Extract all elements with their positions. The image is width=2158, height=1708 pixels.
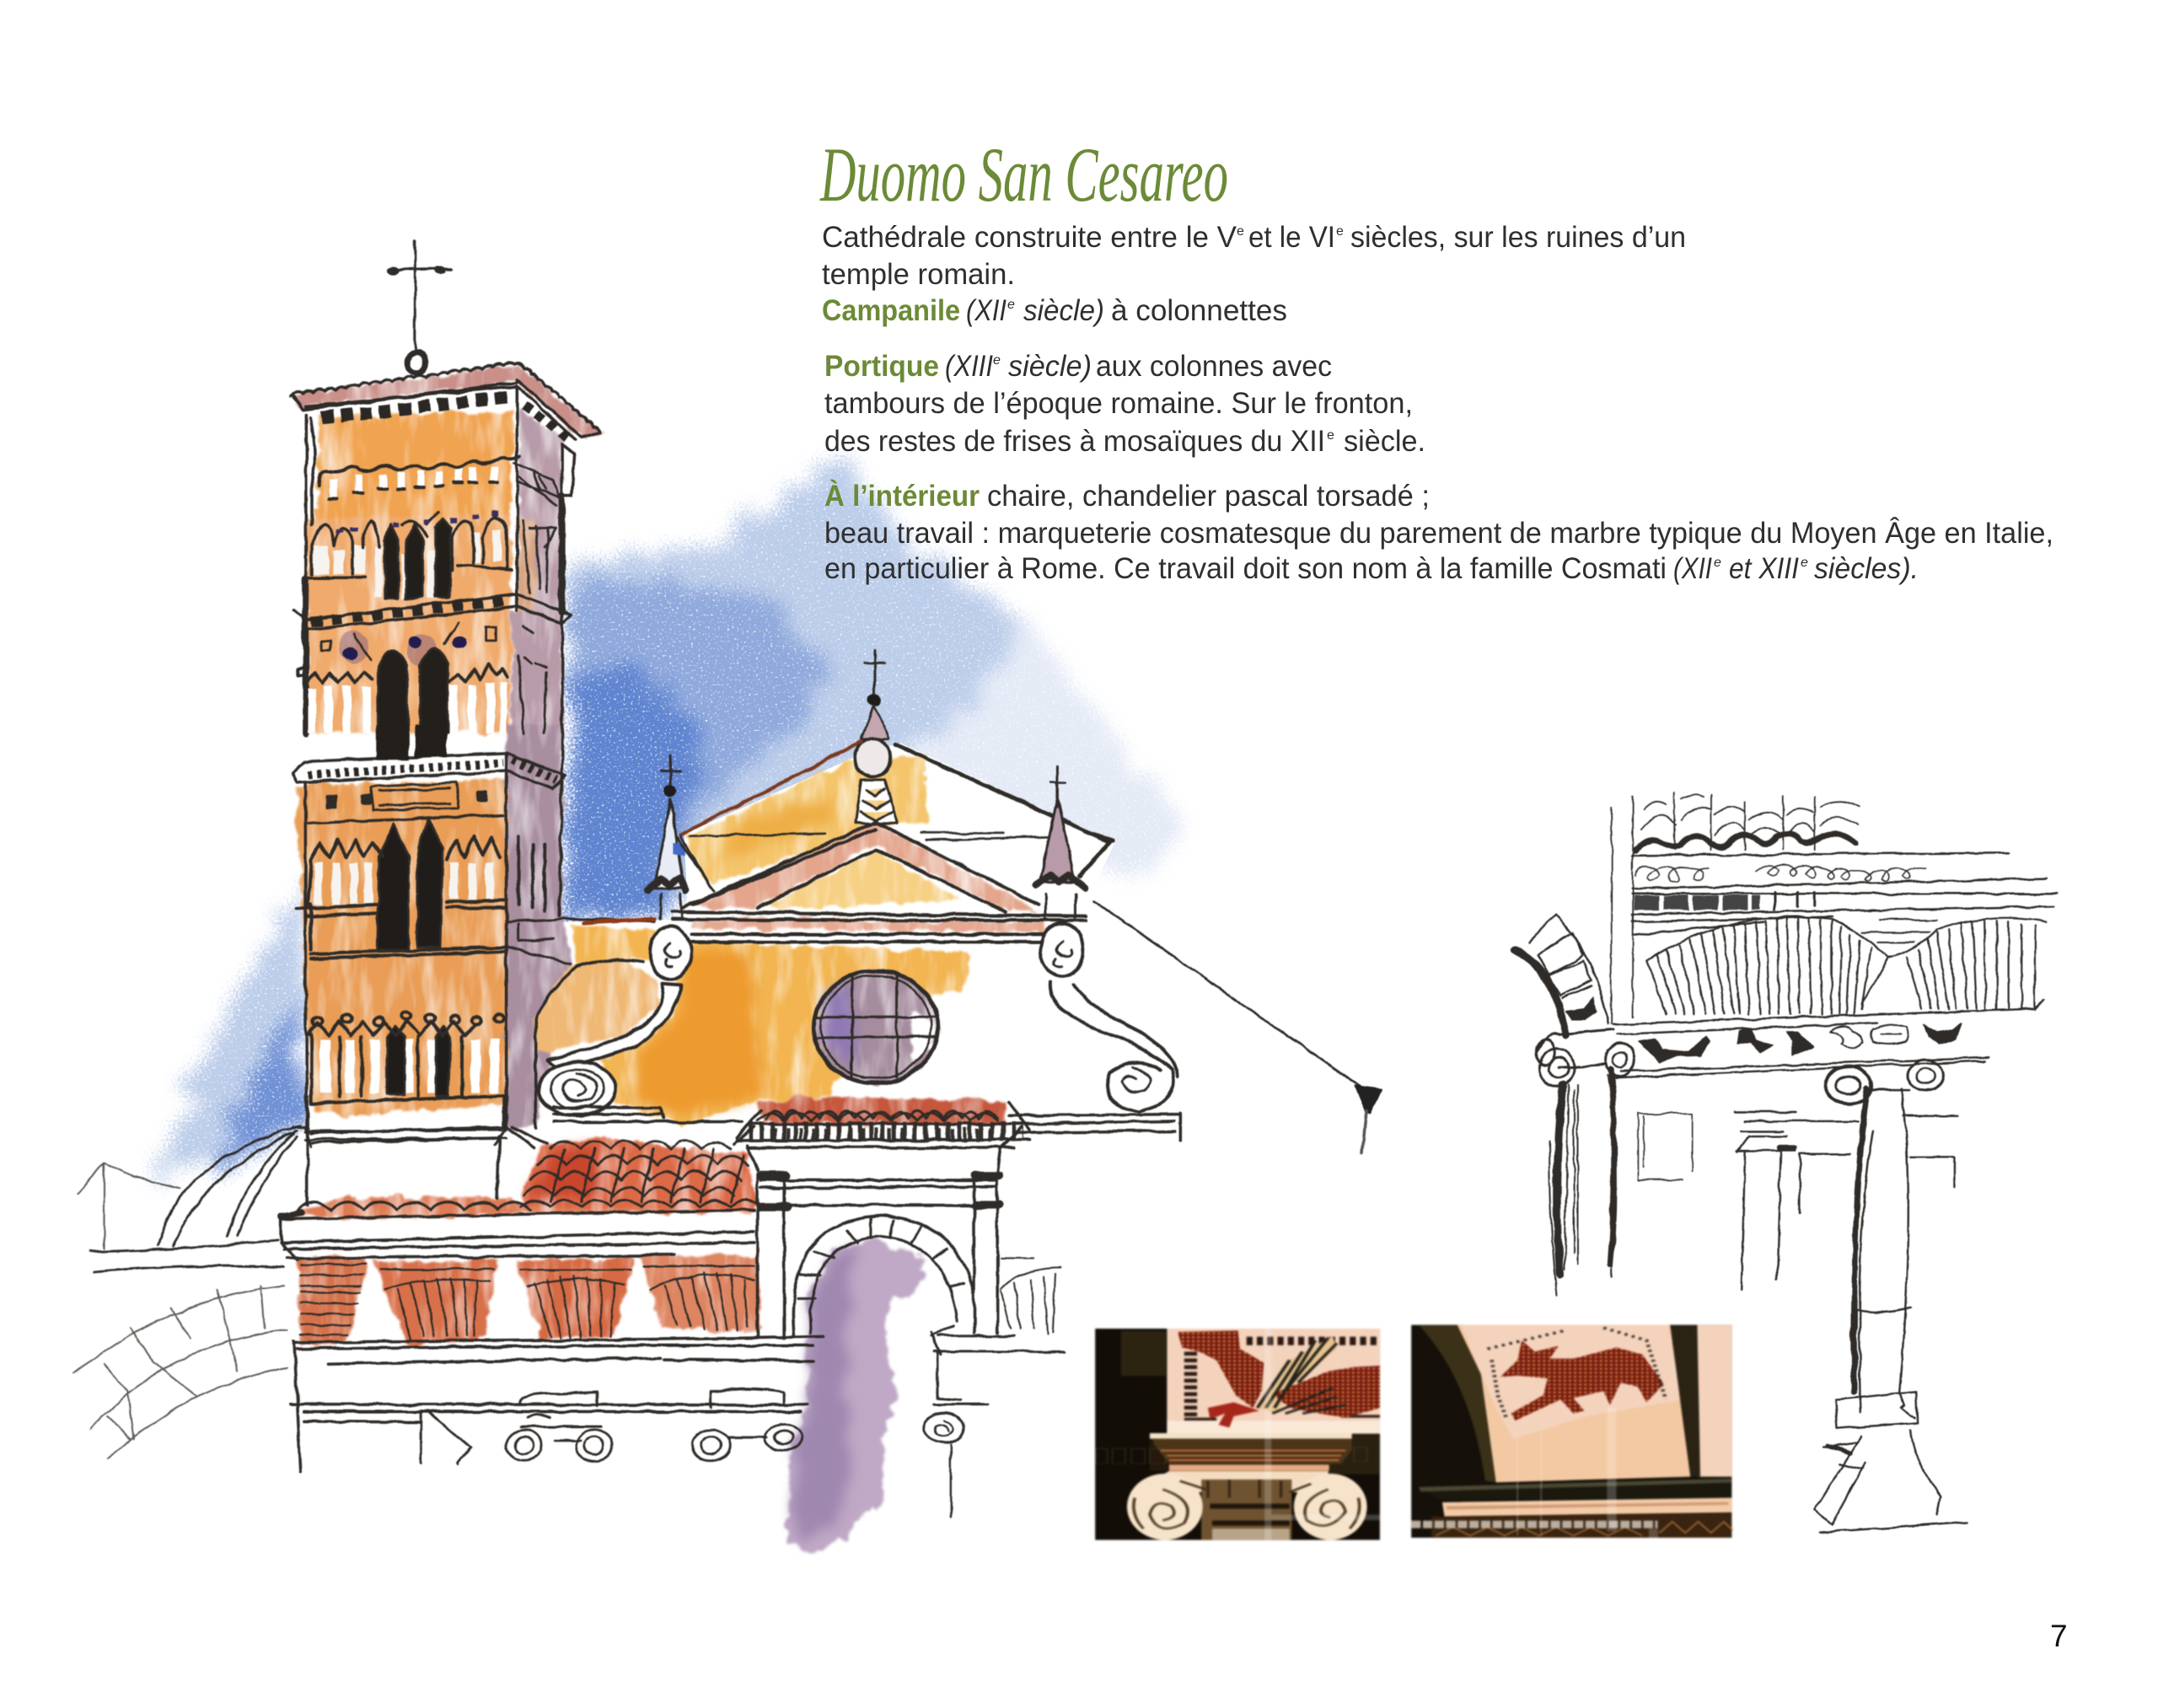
text block: cathedral and campanile: et le VI bbox=[1248, 221, 1335, 254]
column and arcade pencil sketch bbox=[1516, 792, 2058, 1533]
left volute bbox=[650, 926, 691, 980]
sketch: scroll frieze bbox=[1636, 865, 1925, 882]
sketch: column base bbox=[1815, 1392, 1967, 1533]
text block: interior: À l’intérieur bbox=[824, 479, 980, 513]
sketch: left arch and capital bbox=[1516, 950, 1566, 1034]
text block: cathedral and campanile bbox=[822, 221, 1686, 327]
text block: interior: (XII bbox=[1673, 552, 1712, 585]
text block: cathedral and campanile: siècles, sur les ruines d’un bbox=[1350, 221, 1686, 254]
plaque and small openings bbox=[370, 782, 459, 810]
text block: portico: Portique bbox=[824, 350, 939, 383]
paint: upper tower bbox=[293, 365, 601, 733]
sketch: mosaic animals bbox=[1566, 996, 1962, 1062]
gable lines bbox=[681, 742, 862, 835]
pen drawing over the paint bbox=[74, 240, 1381, 1517]
paint: purple wash in the portal bbox=[787, 1238, 924, 1551]
long strip of tiles bbox=[298, 1202, 531, 1210]
upper lights and lower arcade bbox=[339, 631, 369, 663]
text block: cathedral and campanile: Cathédrale construite entre le V bbox=[822, 221, 1237, 254]
sketch: left columns bbox=[1557, 1085, 1563, 1275]
photo: mosaic griffin above an Ionic capital bbox=[1095, 1329, 1380, 1540]
entablature bbox=[281, 1210, 754, 1260]
sketch: fluted arches bbox=[1646, 917, 2046, 1014]
red beast bbox=[1500, 1340, 1664, 1421]
ledge bbox=[1419, 1478, 1731, 1500]
text block: cathedral and campanile: temple romain. bbox=[822, 258, 1015, 291]
junction with the nave bbox=[507, 919, 654, 964]
text block: interior: e bbox=[1714, 556, 1721, 570]
campanile top: cross, roof, first arcades bbox=[291, 240, 601, 733]
frieze hatching bbox=[301, 1265, 366, 1335]
paint: facade bbox=[297, 725, 1044, 1127]
sketch: hatching bbox=[1862, 909, 1937, 943]
capital bbox=[1130, 1471, 1363, 1492]
long ridge line with pen blot bbox=[1094, 901, 1381, 1153]
sketch: background openings bbox=[1638, 1114, 1693, 1180]
mid band bbox=[293, 753, 566, 788]
text block: interior: siècles). bbox=[1814, 552, 1919, 585]
soft darker paint passages bbox=[531, 792, 854, 1542]
text block: cathedral and campanile: e bbox=[1237, 224, 1244, 239]
cornices bbox=[291, 1336, 824, 1472]
mosaic photographs bbox=[1095, 1325, 1732, 1540]
text block: portico: siècle. bbox=[1344, 425, 1425, 458]
text block: portico: des restes de frises à mosaïques du XII bbox=[824, 425, 1325, 458]
small tile roof bbox=[766, 1111, 997, 1119]
sketch: main column bbox=[1825, 1067, 1872, 1104]
text block: portico: e bbox=[993, 353, 1001, 368]
right pinnacle bbox=[1039, 798, 1075, 883]
text block: interior bbox=[824, 479, 2053, 585]
tower foot bbox=[308, 1096, 534, 1205]
text block: interior: chaire, chandelier pascal torsadé ; bbox=[987, 480, 1430, 513]
right volute bbox=[1041, 923, 1083, 976]
text block: portico bbox=[824, 350, 1425, 458]
beam lines bbox=[513, 1107, 1180, 1144]
text block: interior: et XIII bbox=[1729, 552, 1799, 585]
church illustration bbox=[74, 240, 1381, 1551]
sketch: dark dentils bbox=[1634, 895, 1760, 910]
portal top roof bbox=[734, 1127, 1022, 1174]
white knockout behind church so the sky stops at its outline bbox=[158, 369, 1362, 1377]
rose window bbox=[813, 971, 938, 1083]
portal columns bbox=[757, 1174, 997, 1338]
text block: interior: en particulier à Rome. Ce travail doit son nom à la famille Cosmati bbox=[824, 552, 1667, 585]
text block: portico: aux colonnes avec bbox=[1096, 350, 1332, 383]
scan artefact squares bbox=[1096, 1448, 1367, 1464]
text block: interior: e bbox=[1801, 556, 1808, 570]
grey scan squares bbox=[1411, 1513, 1658, 1536]
text block: portico: tambours de l’époque romaine. Sur le fronton, bbox=[824, 387, 1413, 420]
text block: cathedral and campanile: siècle) bbox=[1023, 294, 1104, 327]
photo: mosaic beast on an arch spandrel bbox=[1411, 1325, 1732, 1538]
portal arch bbox=[793, 1216, 974, 1336]
central finial with cross bbox=[864, 649, 885, 694]
volute spirals bbox=[1134, 1490, 1360, 1528]
second band with dentils bbox=[293, 594, 572, 629]
top of the window continued bbox=[376, 725, 447, 760]
side wall right of the portal bbox=[931, 1325, 1064, 1405]
arcade with gothic twin windows bbox=[314, 862, 494, 905]
paint: lower roofs and frieze bbox=[298, 1136, 760, 1345]
sky: blue watercolour wash bbox=[158, 461, 1184, 1181]
text block: cathedral and campanile: e bbox=[1336, 224, 1344, 239]
stone arch bbox=[74, 1286, 287, 1459]
text block: cathedral and campanile: e bbox=[1007, 298, 1015, 312]
campanile lower half and facade bbox=[293, 649, 1180, 1147]
dome and distant building bbox=[158, 1125, 301, 1246]
left pinnacle bbox=[654, 799, 684, 888]
middle arcade bbox=[308, 512, 556, 599]
lower storey of the church bbox=[74, 1096, 1064, 1517]
text block: cathedral and campanile: Campanile bbox=[822, 294, 960, 327]
sketch: beam bbox=[1613, 998, 2044, 1077]
corbel arches bbox=[330, 466, 497, 497]
sketch: roof tiles bbox=[1633, 792, 1860, 1017]
pediment bbox=[684, 822, 1039, 912]
griffin panel bbox=[1167, 1329, 1380, 1434]
Ionic capitals bbox=[421, 1389, 784, 1464]
abacus bbox=[1150, 1433, 1352, 1439]
text block: portico: e bbox=[1327, 428, 1334, 443]
text block: portico: siècle) bbox=[1008, 350, 1092, 383]
text block: cathedral and campanile: à colonnettes bbox=[1111, 294, 1287, 327]
tile roof bbox=[521, 1141, 760, 1206]
page number: 7 bbox=[2050, 1619, 2068, 1653]
title: Duomo San Cesareo bbox=[819, 132, 1228, 218]
watercolour fills: tower, facade, roofs, portal bbox=[293, 365, 1044, 1345]
text block: portico: (XIII bbox=[945, 350, 993, 383]
text block: interior: beau travail : marqueterie cosmatesque du parement de marbre typique du Moyen Âge en Italie, bbox=[824, 517, 2053, 550]
lower arcade bbox=[320, 1039, 499, 1093]
icon: iron cross bbox=[388, 240, 451, 373]
text block: cathedral and campanile: (XII bbox=[966, 294, 1007, 327]
